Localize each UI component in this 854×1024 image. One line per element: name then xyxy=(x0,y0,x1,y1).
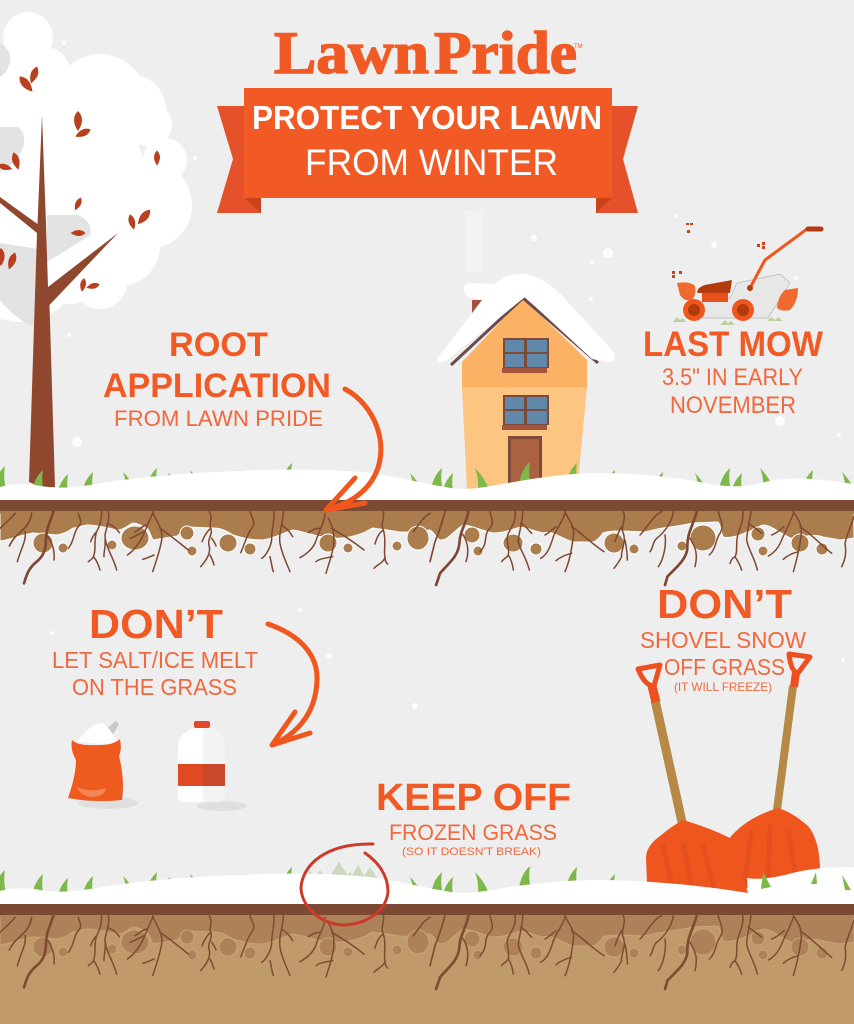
lower deep soil xyxy=(0,916,854,1024)
text: don't shovel: (IT WILL FREEZE) xyxy=(674,680,772,694)
door xyxy=(508,436,542,486)
logo: Lawn Pride: Pride xyxy=(434,20,577,86)
tree foliage shadows xyxy=(0,43,90,330)
icon: salt bag xyxy=(68,721,138,809)
lower soil and stones xyxy=(0,916,854,960)
upper soil and stones xyxy=(0,512,854,556)
left shovel xyxy=(638,665,748,893)
arrow: salt xyxy=(268,624,317,745)
text: last mow: NOVEMBER xyxy=(670,392,796,419)
mower grip xyxy=(808,226,821,232)
chimney smoke xyxy=(465,210,483,272)
mower wheels xyxy=(683,299,705,321)
text: don't salt: ON THE GRASS xyxy=(72,674,237,700)
text: root application xyxy=(103,326,331,431)
text: root application: ROOT xyxy=(169,326,268,364)
logo: Lawn Pride xyxy=(274,20,583,86)
house xyxy=(437,274,615,490)
text: don't shovel: SHOVEL SNOW xyxy=(640,627,806,653)
roof edge xyxy=(451,298,598,365)
chimney xyxy=(472,300,486,316)
mower handle xyxy=(750,229,807,288)
text: keep off: FROZEN GRASS xyxy=(389,820,557,845)
text: keep off: (SO IT DOESN'T BREAK) xyxy=(402,846,541,858)
text: root application: FROM LAWN PRIDE xyxy=(114,406,323,431)
ribbon left tail xyxy=(217,106,261,213)
upper window xyxy=(502,338,549,373)
text: don't salt: LET SALT/ICE MELT xyxy=(52,647,258,673)
title line 2: FROM WINTER xyxy=(305,142,558,183)
upper snow layer xyxy=(0,470,854,500)
upper ground band xyxy=(0,500,854,512)
text: don't shovel: DON’T xyxy=(657,581,792,627)
lower window xyxy=(502,395,549,430)
mower bag xyxy=(697,280,732,293)
ribbon folds xyxy=(244,198,612,213)
text: don't salt: DON’T xyxy=(89,601,223,647)
lower grass blades xyxy=(0,866,854,900)
frozen grass xyxy=(304,862,378,879)
mower xyxy=(672,223,821,325)
title ribbon xyxy=(217,88,638,213)
snow on roof xyxy=(437,274,615,362)
title line 1: PROTECT YOUR LAWN xyxy=(252,99,602,136)
text: last mow: 3.5" IN EARLY xyxy=(662,364,803,391)
shovels xyxy=(638,654,820,893)
text: don't salt xyxy=(52,601,258,700)
lower ground band xyxy=(0,904,854,916)
text: last mow: LAST MOW xyxy=(643,325,823,364)
grass in front of shovels xyxy=(761,872,851,890)
tree foliage covered in snow xyxy=(0,12,192,322)
red circle around frozen grass xyxy=(301,844,388,925)
tree leaves xyxy=(0,65,160,292)
house lower storey xyxy=(462,387,587,490)
mower flying leaves xyxy=(677,282,798,311)
tree xyxy=(0,12,192,487)
tree trunk and branches xyxy=(0,115,118,487)
lower roots xyxy=(0,916,854,989)
arrow: root application xyxy=(326,389,381,510)
text: don't shovel xyxy=(640,581,806,694)
mower body xyxy=(703,274,790,318)
logo: Lawn Pride: Lawn xyxy=(274,20,429,86)
house upper storey xyxy=(462,298,587,387)
mower grass xyxy=(673,317,783,325)
text: don't shovel: OFF GRASS xyxy=(664,654,785,680)
lower snow layer xyxy=(0,867,854,904)
logo: Lawn Pride: TM xyxy=(574,44,583,50)
upper grass blades xyxy=(0,462,854,496)
upper roots xyxy=(0,512,854,585)
icon: ice melt bottle xyxy=(178,721,247,811)
text: last mow xyxy=(643,325,823,419)
text: keep off: KEEP OFF xyxy=(376,777,571,819)
falling snowflakes xyxy=(50,41,845,709)
right shovel xyxy=(728,654,820,892)
ribbon right tail xyxy=(596,106,638,213)
text: keep off xyxy=(376,777,571,858)
text: root application: APPLICATION xyxy=(103,367,331,405)
ribbon main panel xyxy=(244,88,612,198)
